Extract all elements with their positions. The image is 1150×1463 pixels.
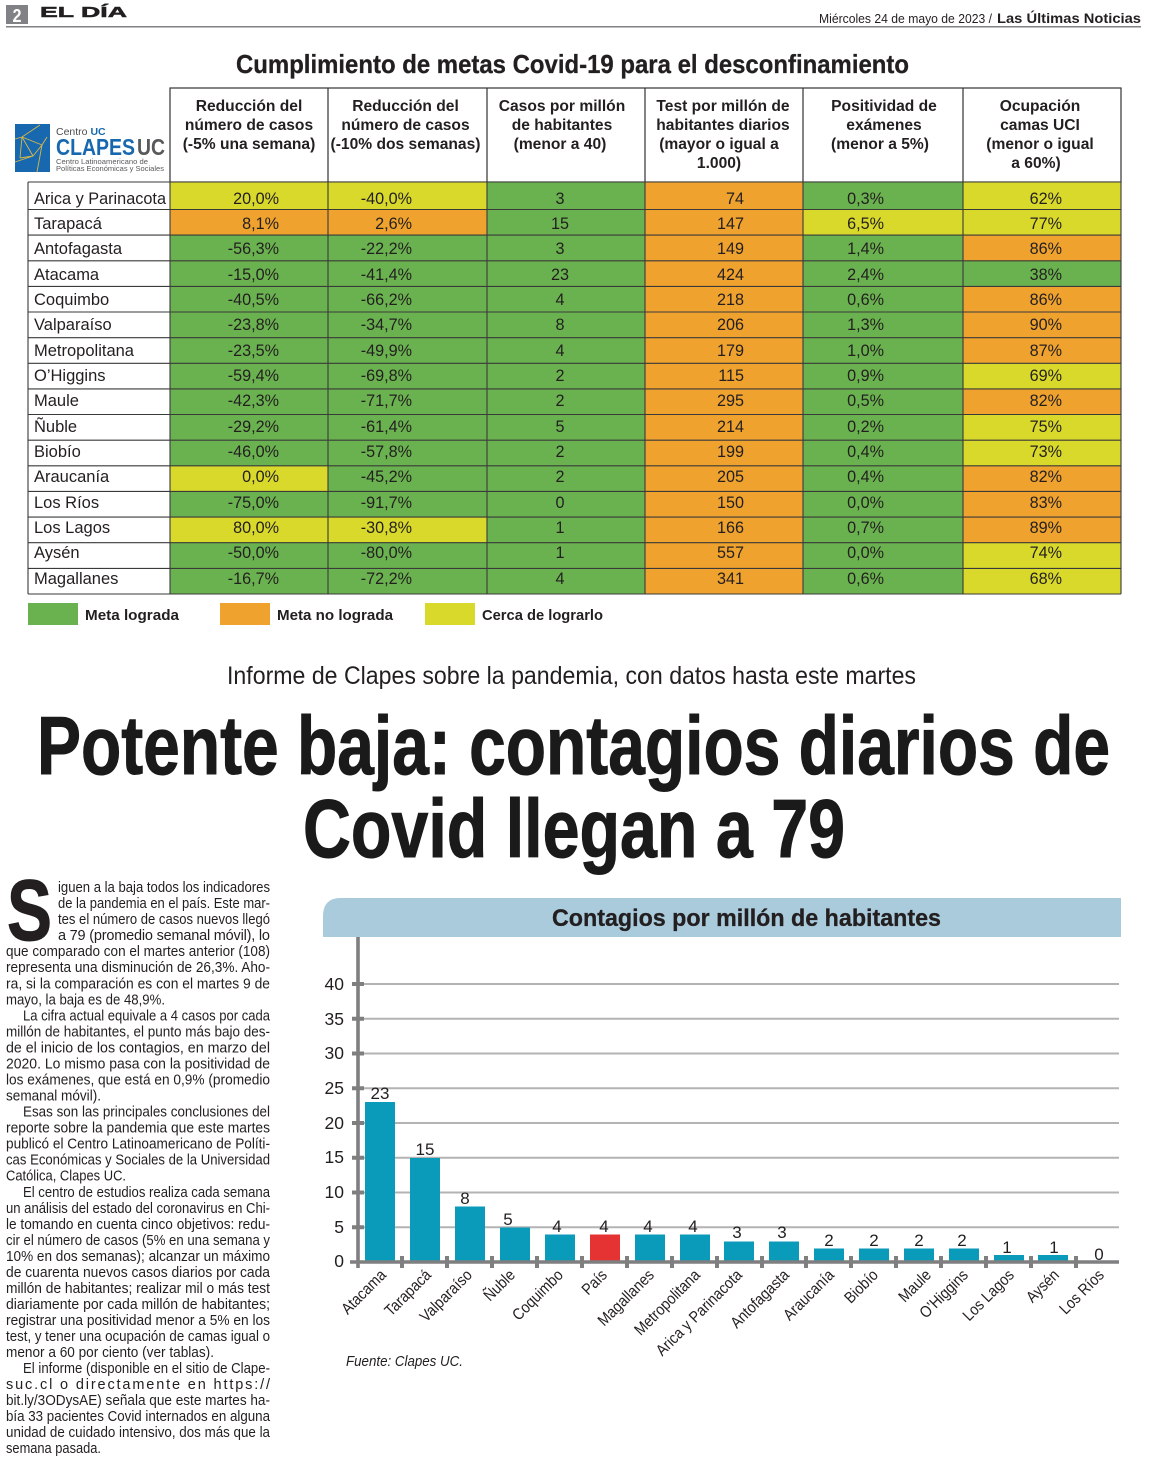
column: test por millón: (mayor o igual a bbox=[659, 136, 779, 153]
column: ocupación UCI: a 60%) bbox=[1011, 155, 1061, 172]
row: Tarapacá: Tarapacá bbox=[34, 215, 103, 233]
row: Aysén: 0,0% bbox=[847, 544, 884, 562]
row: Aysén: Aysén bbox=[34, 544, 80, 562]
y axis labels: 15 bbox=[325, 1147, 344, 1167]
article text: representa una disminución de 26,3%. Aho- bbox=[6, 960, 270, 976]
bar value labels: 2 bbox=[869, 1231, 879, 1250]
row: Aysén: -80,0% bbox=[361, 544, 412, 562]
y axis labels: 40 bbox=[325, 974, 344, 994]
row: Los Ríos: 150 bbox=[717, 494, 744, 512]
category labels: Atacama bbox=[338, 1266, 390, 1318]
bar value labels: 4 bbox=[599, 1217, 609, 1236]
page number bbox=[6, 5, 28, 26]
row: Valparaíso: 8 bbox=[555, 316, 565, 334]
row: Los Ríos: -91,7% bbox=[361, 494, 412, 512]
article text: bit.ly/3ODysAE) señala que este martes ha- bbox=[6, 1393, 270, 1409]
bar value labels: 3 bbox=[732, 1223, 742, 1242]
row: O'Higgins: 0,9% bbox=[847, 367, 884, 385]
y axis labels: 30 bbox=[325, 1043, 344, 1063]
row: Los Ríos: 0 bbox=[555, 494, 565, 512]
bar value labels: 1 bbox=[1002, 1238, 1012, 1257]
category labels: Antofagasta bbox=[727, 1266, 793, 1332]
bar value labels: 4 bbox=[688, 1217, 698, 1236]
page number: 2 bbox=[12, 6, 22, 26]
bar value labels: 5 bbox=[503, 1210, 513, 1229]
article text: test, y tener una ocupación de camas igual o bbox=[6, 1329, 270, 1345]
row: Biobío: -46,0% bbox=[228, 443, 279, 461]
article text: ra, si la comparación es con el martes 9 de bbox=[6, 976, 270, 992]
chart title band: Contagios por millón de habitantes bbox=[552, 905, 941, 932]
row: Aysén: 74% bbox=[1030, 544, 1062, 562]
section name: EL DÍA bbox=[40, 4, 127, 21]
row: Ñuble: 75% bbox=[1030, 418, 1062, 436]
row: Maule: -71,7% bbox=[361, 392, 412, 410]
row: Araucanía: 0,4% bbox=[847, 468, 884, 486]
row: Arica y Parinacota bbox=[34, 182, 1121, 210]
row: Valparaíso: -23,8% bbox=[228, 316, 279, 334]
bars bbox=[365, 1102, 1068, 1262]
row: Valparaíso: 1,3% bbox=[847, 316, 884, 334]
article text: de cuarenta nuevos casos diarios por cada bbox=[6, 1265, 271, 1281]
bar value labels: 15 bbox=[416, 1140, 434, 1159]
row: Biobío: 0,4% bbox=[847, 443, 884, 461]
row: Aysén: 557 bbox=[717, 544, 744, 562]
category labels: Biobío bbox=[841, 1266, 882, 1307]
bar value labels: 0 bbox=[1094, 1245, 1104, 1264]
row: Aysén bbox=[34, 543, 1121, 568]
article text: un análisis del estado del coronavirus en Chi- bbox=[6, 1201, 270, 1217]
logo: Clapes UC bbox=[15, 124, 165, 173]
row: Atacama: -15,0% bbox=[228, 266, 279, 284]
legend: meta no lograda: Meta no lograda bbox=[277, 607, 394, 624]
row: Los Lagos: 1 bbox=[555, 519, 565, 537]
row: Maule: 2 bbox=[555, 392, 565, 410]
y axis labels: 20 bbox=[325, 1113, 344, 1133]
kicker: Informe de Clapes sobre la pandemia, con datos hasta este martes bbox=[227, 662, 916, 690]
data table bbox=[28, 182, 1121, 594]
bar value labels: 8 bbox=[460, 1189, 470, 1208]
row: Atacama: Atacama bbox=[34, 266, 100, 284]
legend bbox=[28, 603, 603, 625]
row: Arica y Parinacota: Arica y Parinacota bbox=[34, 190, 167, 208]
row: Maule: 0,5% bbox=[847, 392, 884, 410]
row: Arica y Parinacota: 62% bbox=[1030, 190, 1062, 208]
row: Atacama: -41,4% bbox=[361, 266, 412, 284]
row: Atacama: 23 bbox=[551, 266, 569, 284]
row: Coquimbo bbox=[34, 286, 1121, 312]
row: Coquimbo: -40,5% bbox=[228, 291, 279, 309]
row: Los Lagos: 80,0% bbox=[233, 519, 279, 537]
row: Antofagasta: Antofagasta bbox=[34, 240, 123, 258]
category labels: Los Lagos bbox=[959, 1266, 1018, 1325]
column: ocupación UCI: Ocupación bbox=[1000, 98, 1080, 115]
row: Magallanes: 341 bbox=[717, 570, 744, 588]
row: Biobío bbox=[34, 440, 1121, 466]
row: Tarapacá: 147 bbox=[717, 215, 744, 233]
row: Ñuble: -61,4% bbox=[361, 418, 412, 436]
article text: cas Económicas y Sociales de la Universidad bbox=[6, 1152, 270, 1168]
chart title band bbox=[323, 898, 1121, 937]
newspaper name: Las Últimas Noticias bbox=[997, 11, 1141, 26]
row: Arica y Parinacota: 0,3% bbox=[847, 190, 884, 208]
row: Arica y Parinacota: 20,0% bbox=[233, 190, 279, 208]
bar value labels bbox=[371, 1084, 1104, 1264]
row: Araucanía: 0,0% bbox=[242, 468, 279, 486]
column: ocupación UCI: camas UCI bbox=[1000, 117, 1080, 134]
bar value labels: 4 bbox=[643, 1217, 653, 1236]
category labels: Aysén bbox=[1023, 1266, 1063, 1306]
row: Ñuble: 0,2% bbox=[847, 418, 884, 436]
row: Magallanes: -72,2% bbox=[361, 570, 412, 588]
row: O'Higgins: O’Higgins bbox=[34, 367, 106, 385]
article text: diariamente por cada millón de habitantes; bbox=[6, 1297, 270, 1313]
article text: los exámenes, que está en 0,9% (promedio bbox=[6, 1072, 270, 1088]
row: Los Ríos: 83% bbox=[1030, 494, 1062, 512]
logo text: Centro Latinoamericano de bbox=[56, 157, 148, 166]
row: Coquimbo: 0,6% bbox=[847, 291, 884, 309]
row: Metropolitana: 87% bbox=[1030, 342, 1062, 360]
column: reducción dos semanas: (-10% dos semanas) bbox=[331, 136, 480, 153]
article text: mayo, la baja es de 48,9%. bbox=[6, 992, 165, 1008]
row: Los Ríos: -75,0% bbox=[228, 494, 279, 512]
source note: Fuente: Clapes UC. bbox=[346, 1353, 463, 1370]
category labels bbox=[338, 1266, 1108, 1360]
row: Antofagasta bbox=[34, 235, 1121, 261]
row: Magallanes: 68% bbox=[1030, 570, 1062, 588]
article text: iguen a la baja todos los indicadores bbox=[58, 880, 270, 896]
row: Metropolitana: 1,0% bbox=[847, 342, 884, 360]
row: O'Higgins: 115 bbox=[718, 367, 744, 385]
row: Maule bbox=[34, 389, 1121, 414]
row: Maule: 295 bbox=[717, 392, 744, 410]
axes bbox=[350, 937, 1119, 1268]
article text bbox=[6, 863, 271, 1457]
category labels: Valparaíso bbox=[416, 1266, 476, 1326]
row: Araucanía: Araucanía bbox=[34, 468, 110, 486]
row: Ñuble bbox=[34, 414, 1121, 440]
row: Antofagasta: 86% bbox=[1030, 240, 1062, 258]
row: Araucanía: 205 bbox=[717, 468, 744, 486]
row: Maule: -42,3% bbox=[228, 392, 279, 410]
row: Maule: Maule bbox=[34, 392, 79, 410]
article text: El centro de estudios realiza cada semana bbox=[23, 1185, 271, 1201]
row: Araucanía bbox=[34, 466, 1121, 491]
row: Tarapacá: 77% bbox=[1030, 215, 1062, 233]
row: Metropolitana: Metropolitana bbox=[34, 342, 135, 360]
column: reducción una semana: Reducción del bbox=[196, 98, 302, 115]
row: Coquimbo: -66,2% bbox=[361, 291, 412, 309]
row: O'Higgins bbox=[34, 363, 1121, 389]
category labels: Araucanía bbox=[780, 1266, 838, 1324]
row: Ñuble: 214 bbox=[717, 418, 744, 436]
row: Tarapacá: 2,6% bbox=[375, 215, 412, 233]
row: Araucanía: 2 bbox=[555, 468, 565, 486]
article text: a 79 (promedio semanal móvil), lo bbox=[58, 928, 270, 944]
row: Magallanes: Magallanes bbox=[34, 570, 118, 588]
category labels: Los Ríos bbox=[1056, 1266, 1108, 1318]
y axis labels: 25 bbox=[325, 1078, 344, 1098]
article text: cir el número de casos (5% en una semana y bbox=[6, 1233, 271, 1249]
row: Coquimbo: Coquimbo bbox=[34, 291, 109, 309]
row: Antofagasta: 1,4% bbox=[847, 240, 884, 258]
category labels: Maule bbox=[895, 1266, 935, 1306]
article text: tes el número de casos nuevos llegó bbox=[58, 912, 270, 928]
row: Valparaíso: 206 bbox=[717, 316, 744, 334]
row: Aysén: 1 bbox=[555, 544, 565, 562]
row: Tarapacá bbox=[34, 210, 1121, 235]
article text: Católica, Clapes UC. bbox=[6, 1168, 126, 1184]
article text: registrar una positividad menor a 5% en los bbox=[6, 1313, 270, 1329]
row: Biobío: -57,8% bbox=[361, 443, 412, 461]
row: Los Lagos: 89% bbox=[1030, 519, 1062, 537]
row: Antofagasta: 149 bbox=[717, 240, 744, 258]
row: Ñuble: 5 bbox=[555, 418, 565, 436]
category labels: Arica y Parinacota bbox=[652, 1266, 746, 1360]
row: Ñuble: -29,2% bbox=[228, 418, 279, 436]
y axis labels: 5 bbox=[334, 1217, 344, 1237]
chart panel: contagios por millón de habitantes bbox=[323, 898, 1121, 1370]
column: casos por millón: (menor a 40) bbox=[514, 136, 606, 153]
row: Los Ríos: 0,0% bbox=[847, 494, 884, 512]
row: O'Higgins: -69,8% bbox=[361, 367, 412, 385]
row: Araucanía: 82% bbox=[1030, 468, 1062, 486]
page header bbox=[6, 4, 1141, 28]
row: Los Lagos: -30,8% bbox=[361, 519, 412, 537]
article text: reporte sobre la pandemia que este martes bbox=[6, 1120, 270, 1136]
row: Biobío: 199 bbox=[717, 443, 744, 461]
row: Atacama: 38% bbox=[1030, 266, 1062, 284]
bar value labels: 2 bbox=[957, 1231, 967, 1250]
row: Valparaíso: Valparaíso bbox=[34, 316, 112, 334]
column: ocupación UCI: (menor o igual bbox=[986, 136, 1094, 153]
row: Antofagasta: -22,2% bbox=[361, 240, 412, 258]
legend: meta no lograda bbox=[220, 603, 394, 625]
y axis labels: 0 bbox=[334, 1251, 344, 1271]
logo mark bbox=[15, 124, 50, 172]
date: Miércoles 24 de mayo de 2023 / bbox=[819, 12, 993, 26]
row: Antofagasta: 3 bbox=[555, 240, 565, 258]
y axis labels: 35 bbox=[325, 1009, 344, 1029]
row: Coquimbo: 218 bbox=[717, 291, 744, 309]
article text: suc.cl o directamente en https:// bbox=[6, 1377, 271, 1393]
row: Magallanes: 0,6% bbox=[847, 570, 884, 588]
row: Coquimbo: 86% bbox=[1030, 291, 1062, 309]
row: Los Ríos bbox=[34, 491, 1121, 517]
row: Arica y Parinacota: 3 bbox=[555, 190, 565, 208]
article text: 2020. Lo mismo pasa con la positividad de bbox=[6, 1056, 270, 1072]
legend: meta lograda: Meta lograda bbox=[85, 607, 180, 624]
bar value labels: 2 bbox=[914, 1231, 924, 1250]
row: Los Ríos: Los Ríos bbox=[34, 494, 99, 512]
column: test por millón: 1.000) bbox=[697, 155, 741, 172]
article text: millón de habitantes, el punto más bajo des- bbox=[6, 1024, 270, 1040]
table header bbox=[170, 88, 1121, 182]
row: Arica y Parinacota: 74 bbox=[726, 190, 744, 208]
category labels: Coquimbo bbox=[509, 1266, 567, 1324]
row: Valparaíso: 90% bbox=[1030, 316, 1062, 334]
table title: Cumplimiento de metas Covid-19 para el desconfinamiento bbox=[236, 49, 909, 79]
article text: le tomando en cuenta cinco objetivos: redu- bbox=[6, 1217, 270, 1233]
bar value labels: 3 bbox=[777, 1223, 787, 1242]
row: Valparaíso bbox=[34, 312, 1121, 338]
bar value labels: 4 bbox=[552, 1217, 562, 1236]
category labels: O’Higgins bbox=[916, 1266, 972, 1322]
column: positividad: (menor a 5%) bbox=[831, 136, 929, 153]
logo text: UC bbox=[137, 134, 165, 160]
article text: publicó el Centro Latinoamericano de Políti- bbox=[6, 1136, 270, 1152]
row: Tarapacá: 15 bbox=[551, 215, 569, 233]
row: Maule: 82% bbox=[1030, 392, 1062, 410]
article text: El informe (disponible en el sitio de Clape- bbox=[23, 1361, 270, 1377]
row: Metropolitana: 179 bbox=[717, 342, 744, 360]
headline: Covid llegan a 79 bbox=[303, 782, 845, 875]
row: Los Lagos bbox=[34, 517, 1121, 543]
column: reducción dos semanas: Reducción del bbox=[352, 98, 459, 115]
row: O'Higgins: 2 bbox=[555, 367, 565, 385]
row: O'Higgins: 69% bbox=[1030, 367, 1062, 385]
column: reducción una semana: número de casos bbox=[185, 117, 313, 134]
y axis labels bbox=[325, 974, 344, 1271]
row: Metropolitana: 4 bbox=[555, 342, 565, 360]
article text: unidad de cuidado intensivo, dos más que la bbox=[6, 1425, 271, 1441]
row: Tarapacá: 6,5% bbox=[847, 215, 884, 233]
row: Biobío: Biobío bbox=[34, 443, 81, 461]
row: Biobío: 73% bbox=[1030, 443, 1062, 461]
article text: de el inicio de los contagios, en marzo del bbox=[6, 1040, 270, 1056]
column: reducción una semana: (-5% una semana) bbox=[183, 136, 315, 153]
article text: bía 33 pacientes Covid internados en alguna bbox=[6, 1409, 271, 1425]
row: Antofagasta: -56,3% bbox=[228, 240, 279, 258]
column: casos por millón: de habitantes bbox=[512, 117, 613, 134]
column: test por millón: Test por millón de bbox=[656, 98, 790, 115]
legend: cerca de lograrlo bbox=[425, 603, 603, 625]
column: casos por millón: Casos por millón bbox=[499, 98, 625, 115]
category labels: Magallanes bbox=[594, 1266, 658, 1330]
legend: cerca de lograrlo: Cerca de lograrlo bbox=[482, 607, 603, 624]
article text: semana pasada. bbox=[6, 1441, 101, 1457]
row: Los Lagos: 0,7% bbox=[847, 519, 884, 537]
bar value labels: 23 bbox=[371, 1084, 389, 1103]
row: Tarapacá: 8,1% bbox=[242, 215, 279, 233]
row: Metropolitana: -49,9% bbox=[361, 342, 412, 360]
article text: menor a 60 por ciento (ver tablas). bbox=[6, 1345, 214, 1361]
article text: millón de habitantes; realizar mil o más test bbox=[6, 1281, 270, 1297]
drop cap: S bbox=[7, 863, 52, 959]
row: Araucanía: -45,2% bbox=[361, 468, 412, 486]
row: Magallanes: -16,7% bbox=[228, 570, 279, 588]
row: Atacama: 2,4% bbox=[847, 266, 884, 284]
article text: 10% en dos semanas); alcanzar un máximo bbox=[6, 1249, 270, 1265]
row: Metropolitana: -23,5% bbox=[228, 342, 279, 360]
row: Magallanes bbox=[34, 568, 1121, 594]
row: Aysén: -50,0% bbox=[228, 544, 279, 562]
column: reducción dos semanas: número de casos bbox=[341, 117, 470, 134]
logo text: Centro UC bbox=[56, 126, 106, 138]
row: Magallanes: 4 bbox=[555, 570, 565, 588]
column: test por millón: habitantes diarios bbox=[656, 117, 790, 134]
row: Metropolitana bbox=[34, 338, 1121, 363]
row: Atacama bbox=[34, 261, 1121, 286]
logo text bbox=[56, 126, 165, 173]
article text: semanal móvil). bbox=[6, 1088, 101, 1104]
row: Ñuble: Ñuble bbox=[34, 416, 77, 436]
category labels: Metropolitana bbox=[631, 1266, 704, 1339]
bar value labels: 1 bbox=[1049, 1238, 1059, 1257]
row: Los Lagos: 166 bbox=[717, 519, 744, 537]
article text: que comparado con el martes anterior (108) bbox=[6, 944, 270, 960]
article text: La cifra actual equivale a 4 casos por cada bbox=[23, 1008, 271, 1024]
category labels: País bbox=[578, 1266, 611, 1299]
y axis labels: 10 bbox=[325, 1182, 344, 1202]
row: Biobío: 2 bbox=[555, 443, 565, 461]
column: positividad: Positividad de bbox=[831, 98, 937, 115]
category labels: Ñuble bbox=[480, 1266, 519, 1305]
article text: de la pandemia en el país. Este mar- bbox=[58, 896, 270, 912]
row: Los Lagos: Los Lagos bbox=[34, 519, 110, 537]
row: Arica y Parinacota: -40,0% bbox=[361, 190, 412, 208]
logo text: CLAPES bbox=[56, 134, 135, 160]
legend: meta lograda bbox=[28, 603, 180, 625]
article text: Esas son las principales conclusiones del bbox=[23, 1104, 270, 1120]
row: Atacama: 424 bbox=[717, 266, 744, 284]
bar value labels: 2 bbox=[824, 1231, 834, 1250]
logo text: Políticas Económicas y Sociales bbox=[56, 164, 164, 173]
row: Coquimbo: 4 bbox=[555, 291, 565, 309]
category labels: Tarapacá bbox=[381, 1266, 435, 1320]
row: O'Higgins: -59,4% bbox=[228, 367, 279, 385]
row: Valparaíso: -34,7% bbox=[361, 316, 412, 334]
headline bbox=[37, 699, 1110, 875]
column: positividad: exámenes bbox=[846, 117, 922, 134]
